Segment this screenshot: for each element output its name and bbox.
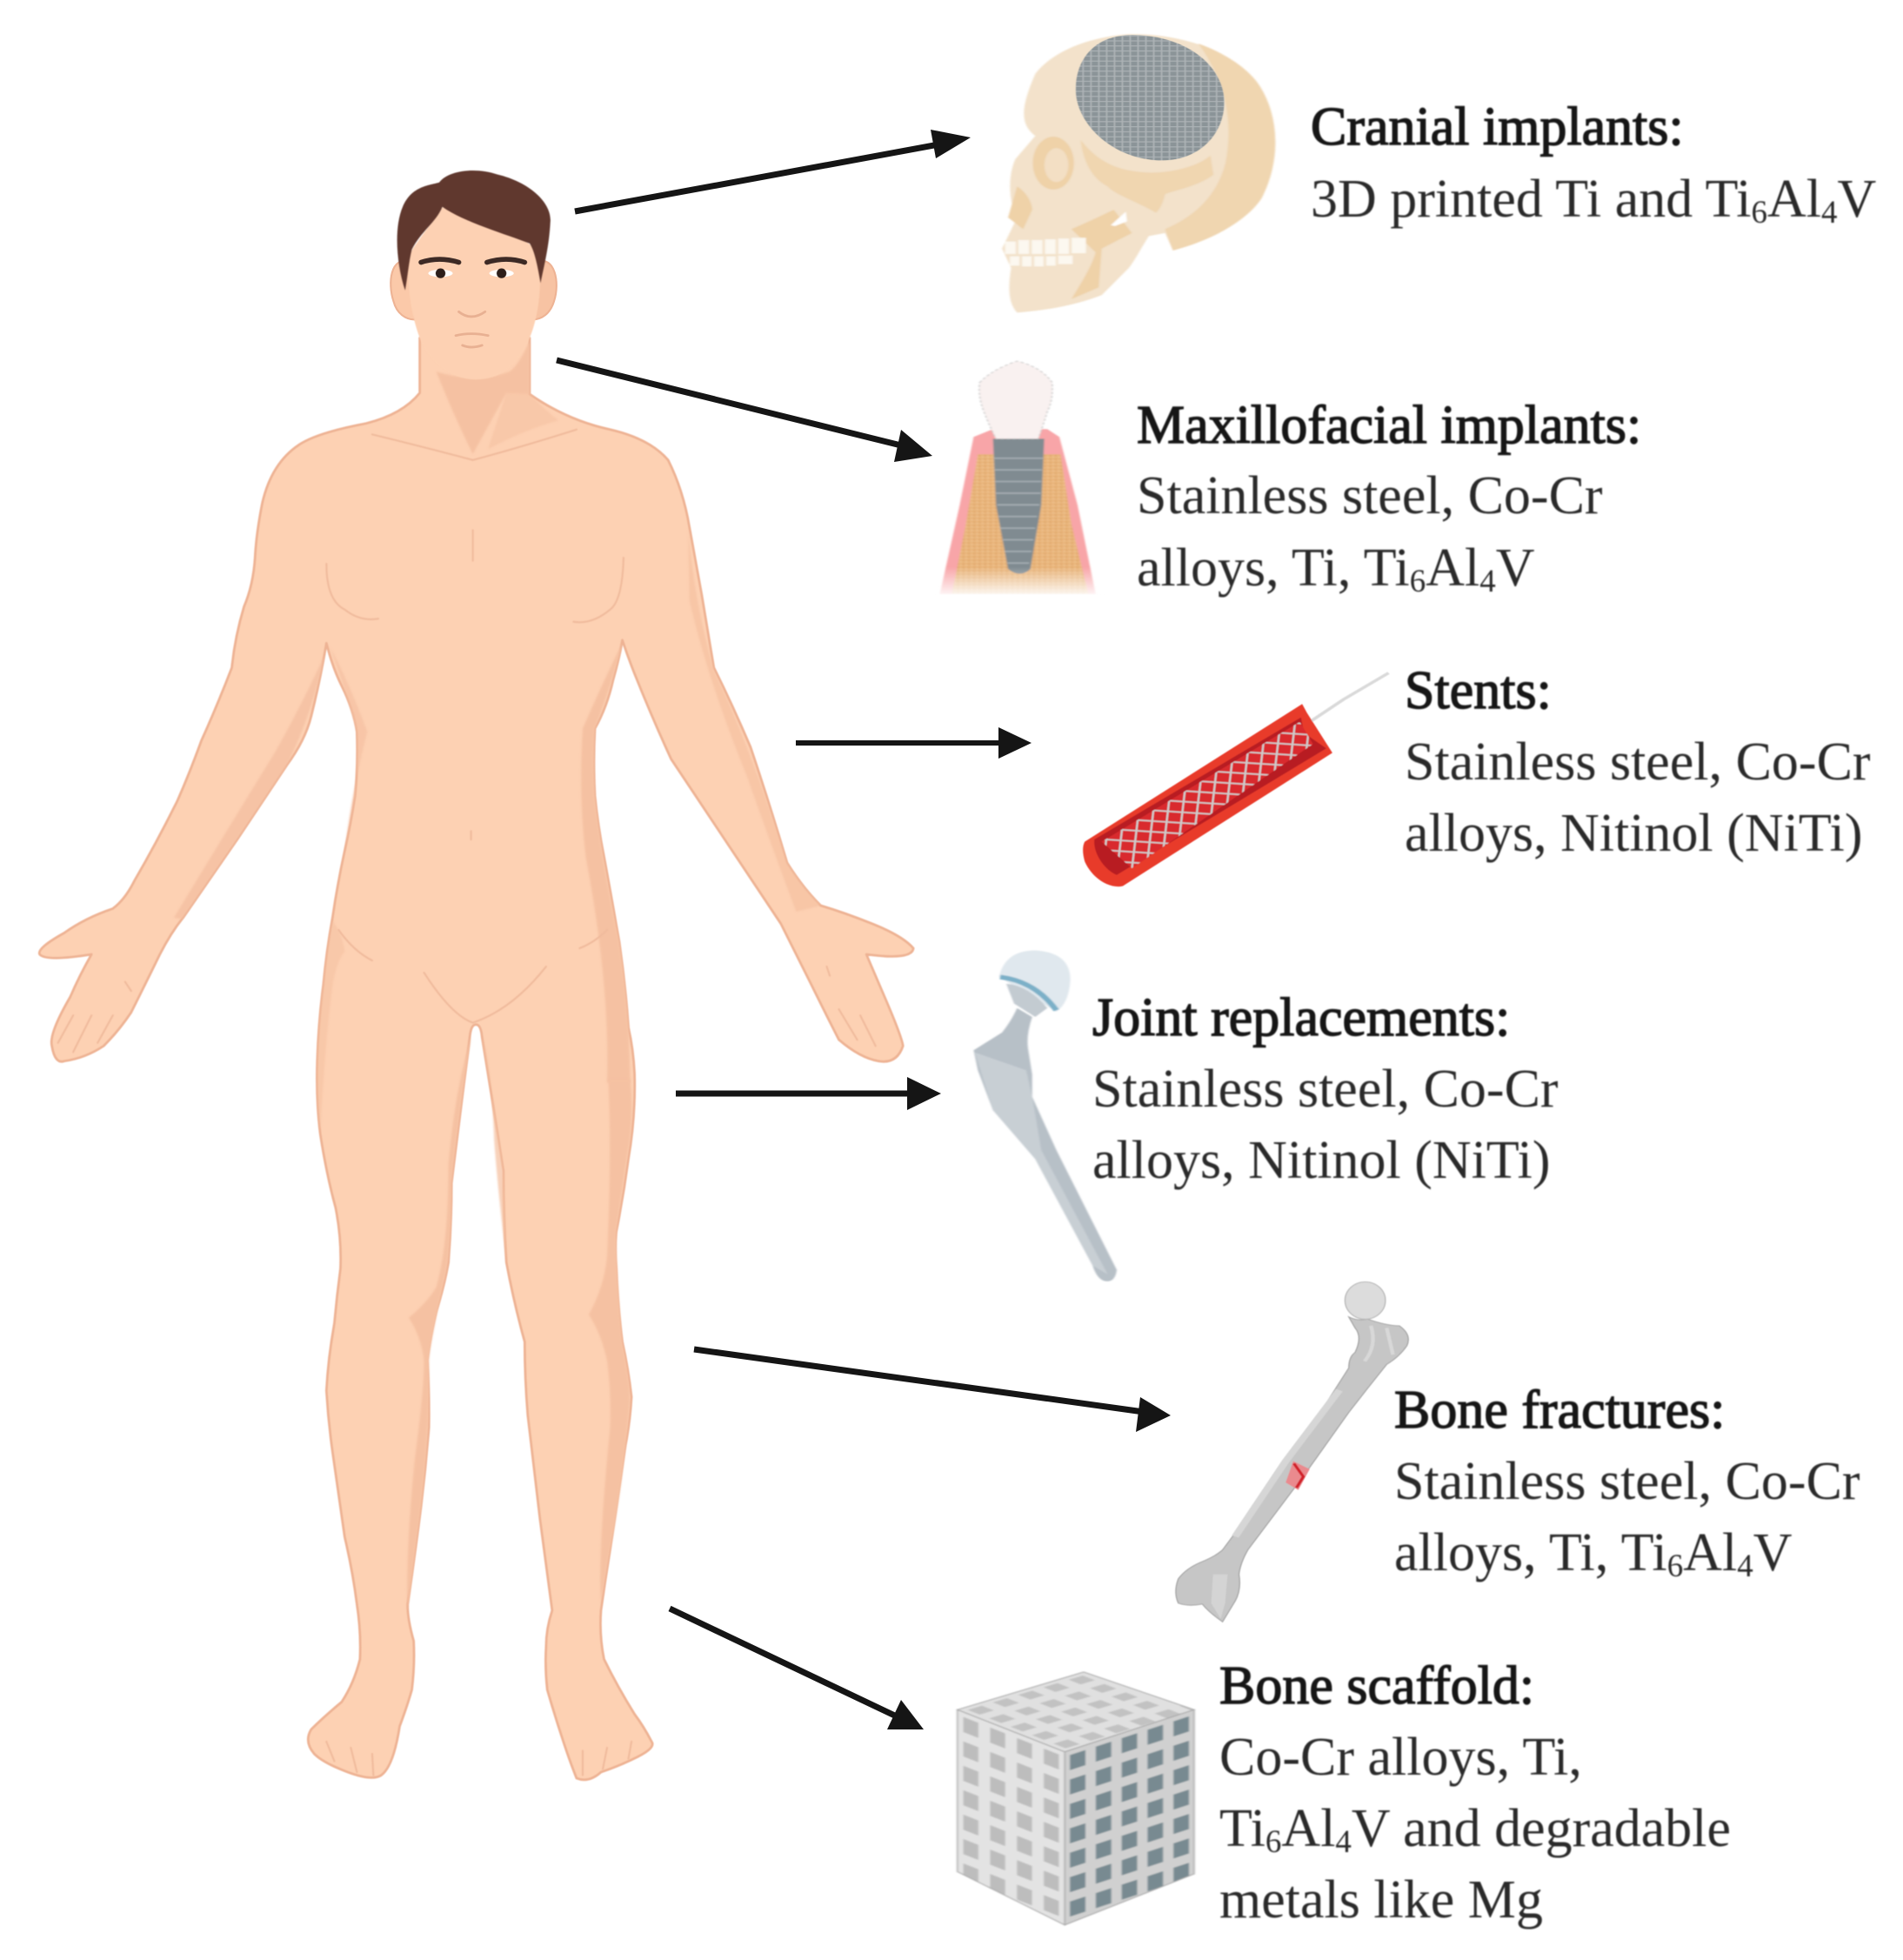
text: bone fractures: V (1753, 1523, 1793, 1582)
heading: Maxillofacial implants: (1137, 396, 1641, 455)
crown (979, 361, 1052, 438)
eye socket (1032, 137, 1074, 190)
gum (940, 429, 1096, 594)
arrow: jaw to maxillofacial implant (557, 360, 932, 462)
text: joint replacements (1092, 988, 1559, 1190)
text: bone fractures: alloys, Ti, Ti (1394, 1523, 1667, 1582)
artery lumen (1094, 718, 1326, 875)
implant screw (993, 438, 1045, 574)
text: maxillofacial implants: V (1496, 538, 1535, 598)
icon: stent in artery (1083, 673, 1388, 886)
heading: Stents: (1405, 661, 1552, 720)
human body figure (39, 171, 913, 1780)
anatomical lines (58, 430, 876, 1776)
materials: Stainless steel, Co-Cr (1092, 1060, 1559, 1119)
jaw gap (1111, 211, 1127, 226)
artery wall (1083, 704, 1332, 886)
text: maxillofacial implants: 4 (1479, 564, 1496, 599)
skull base (1002, 34, 1275, 312)
body shading (174, 341, 821, 1131)
eyes (428, 269, 514, 278)
text: bone scaffold: 4 (1335, 1824, 1352, 1860)
femoral head (1345, 1281, 1386, 1319)
femur bone (1176, 1317, 1408, 1622)
materials: Al (1767, 170, 1821, 229)
acetabular cup (999, 950, 1071, 1012)
heading: Joint replacements: (1092, 988, 1510, 1047)
text: stents: alloys, Nitinol (NiTi) (1405, 804, 1863, 863)
upper teeth (1005, 237, 1086, 254)
heading: Cranial implants: (1311, 97, 1684, 157)
materials: Stainless steel, Co-Cr (1394, 1452, 1860, 1511)
face (409, 207, 540, 379)
nose and mouth (456, 311, 488, 347)
text: bone scaffold: Ti (1219, 1799, 1265, 1858)
icon: skull with cranial mesh implant (1002, 34, 1275, 312)
femoral head (1006, 984, 1047, 1017)
bone highlight (1235, 1390, 1339, 1536)
stent mesh (1102, 722, 1313, 868)
materials: Stainless steel, Co-Cr (1405, 732, 1871, 792)
text: bone scaffold: Al (1281, 1799, 1335, 1858)
top face (958, 1672, 1194, 1752)
lower teeth (1010, 256, 1072, 266)
materials: 3D printed Ti and Ti (1311, 170, 1752, 229)
text: maxillofacial implants (1137, 396, 1641, 599)
text: stents (1405, 661, 1871, 863)
text: bone scaffold: 6 (1265, 1824, 1281, 1860)
heading: Bone fractures: (1394, 1381, 1725, 1440)
heading: Bone scaffold: (1219, 1656, 1534, 1716)
icon: hip joint replacement (973, 950, 1117, 1281)
leg shading (407, 1037, 631, 1610)
icon: dental implant (932, 361, 1108, 598)
temporal region (1080, 140, 1213, 213)
femoral stem (973, 1008, 1117, 1281)
materials: V (1838, 170, 1877, 229)
materials: Stainless steel, Co-Cr (1137, 466, 1603, 525)
text: joint replacements: alloys, Nitinol (NiTi) (1092, 1131, 1550, 1190)
condyle detail (1212, 1575, 1227, 1619)
arrow: head to cranial implant (575, 130, 971, 211)
text: bone scaffold: metals like Mg (1219, 1870, 1543, 1930)
icon: fractured femur (1176, 1281, 1408, 1622)
trochanter detail (1365, 1326, 1393, 1361)
hair (397, 171, 551, 291)
fracture mark (1285, 1462, 1310, 1490)
arrow: hip to joint replacement (676, 1077, 941, 1110)
text: bone scaffold: V and degradable (1352, 1799, 1731, 1858)
text: bone scaffold (1219, 1656, 1731, 1930)
text: maxillofacial implants: Al (1426, 538, 1479, 598)
head (391, 171, 557, 379)
arrow: chest to stents (796, 727, 1032, 759)
right face (1065, 1709, 1194, 1925)
text: cranial implants (1311, 97, 1877, 231)
materials: Co-Cr alloys, Ti, (1219, 1728, 1582, 1787)
text: bone fractures: Al (1683, 1523, 1737, 1582)
ears (391, 261, 415, 319)
arrow: leg to bone scaffold (670, 1609, 924, 1729)
cup rim (1000, 977, 1057, 1010)
materials: 4 (1821, 195, 1838, 231)
text: maxillofacial implants: alloys, Ti, Ti (1137, 538, 1410, 598)
bottom fade (932, 567, 1108, 598)
icon: porous bone scaffold cube (958, 1672, 1194, 1925)
arrow: thigh to bone fracture (694, 1349, 1171, 1432)
cheek and jaw shading (1008, 186, 1132, 299)
text: bone fractures: 4 (1737, 1549, 1753, 1584)
materials: 6 (1752, 195, 1767, 231)
guide wire (1310, 673, 1388, 722)
text: maxillofacial implants: 6 (1410, 564, 1426, 599)
left face (958, 1709, 1065, 1925)
text: bone fractures (1394, 1381, 1860, 1584)
body silhouette (39, 338, 913, 1780)
eyebrows (421, 259, 524, 263)
skull back shading (1165, 43, 1275, 251)
text: bone fractures: 6 (1667, 1549, 1683, 1584)
jaw bone (952, 454, 1088, 594)
mesh implant (1076, 35, 1225, 160)
